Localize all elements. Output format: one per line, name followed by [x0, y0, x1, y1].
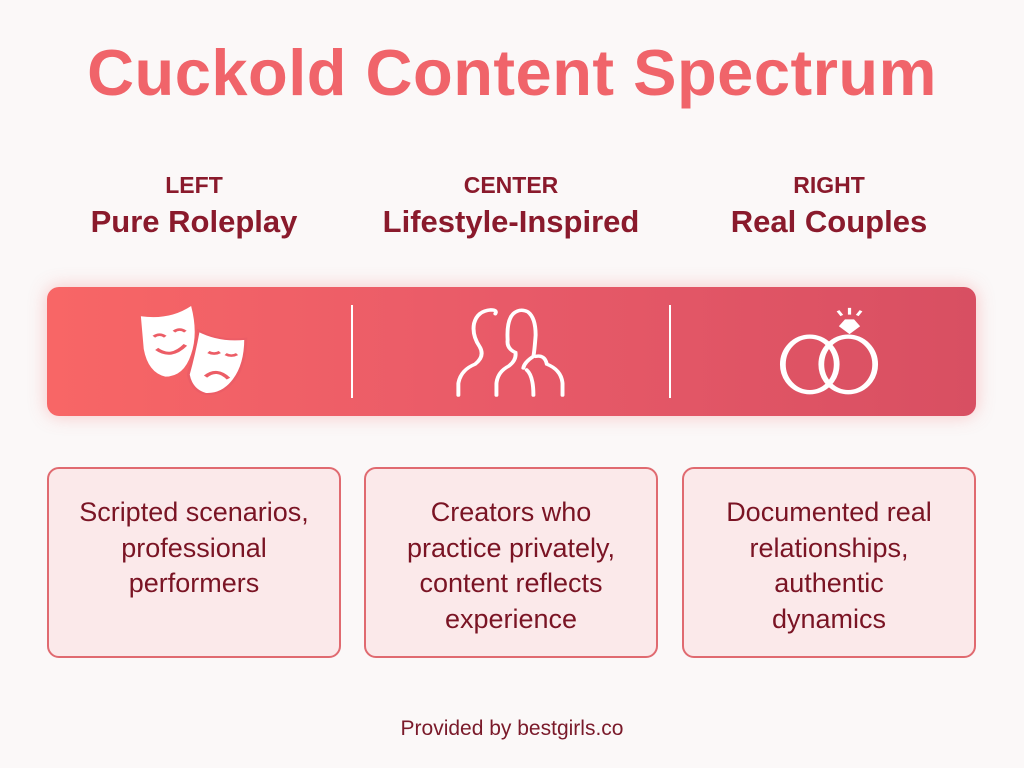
icon: wedding rings [780, 308, 878, 394]
heading: center [383, 172, 639, 239]
box: left description: professional [121, 532, 267, 562]
title: Cuckold Content Spectrum [87, 36, 937, 109]
box: left description [47, 467, 341, 658]
heading: left [91, 172, 298, 239]
box: center description: Creators who [431, 497, 591, 527]
box: left description: performers [129, 568, 259, 598]
box: center description: experience [445, 604, 577, 634]
box: center description: practice privately, [407, 532, 615, 562]
box: center description: content reflects [419, 568, 603, 598]
box: left description: Scripted scenarios, [79, 497, 309, 527]
box: right description: dynamics [772, 604, 886, 634]
box: right description: Documented real [726, 497, 932, 527]
heading: center: CENTER [464, 172, 558, 198]
footer: Provided by bestgirls.co [401, 717, 623, 740]
box: right description: authentic [774, 568, 884, 598]
icon: theater masks [140, 306, 244, 393]
box: center description [364, 467, 658, 658]
box: right description: relationships, [749, 532, 909, 562]
heading: right [731, 172, 927, 239]
heading: left: Pure Roleplay [91, 204, 297, 239]
spectrum band [47, 287, 976, 416]
heading: right: Real Couples [731, 204, 927, 239]
heading: right: RIGHT [793, 172, 865, 198]
box: right description [682, 467, 976, 658]
heading: left: LEFT [165, 172, 223, 198]
heading: center: Lifestyle-Inspired [383, 204, 639, 239]
icon: two people [456, 308, 564, 397]
